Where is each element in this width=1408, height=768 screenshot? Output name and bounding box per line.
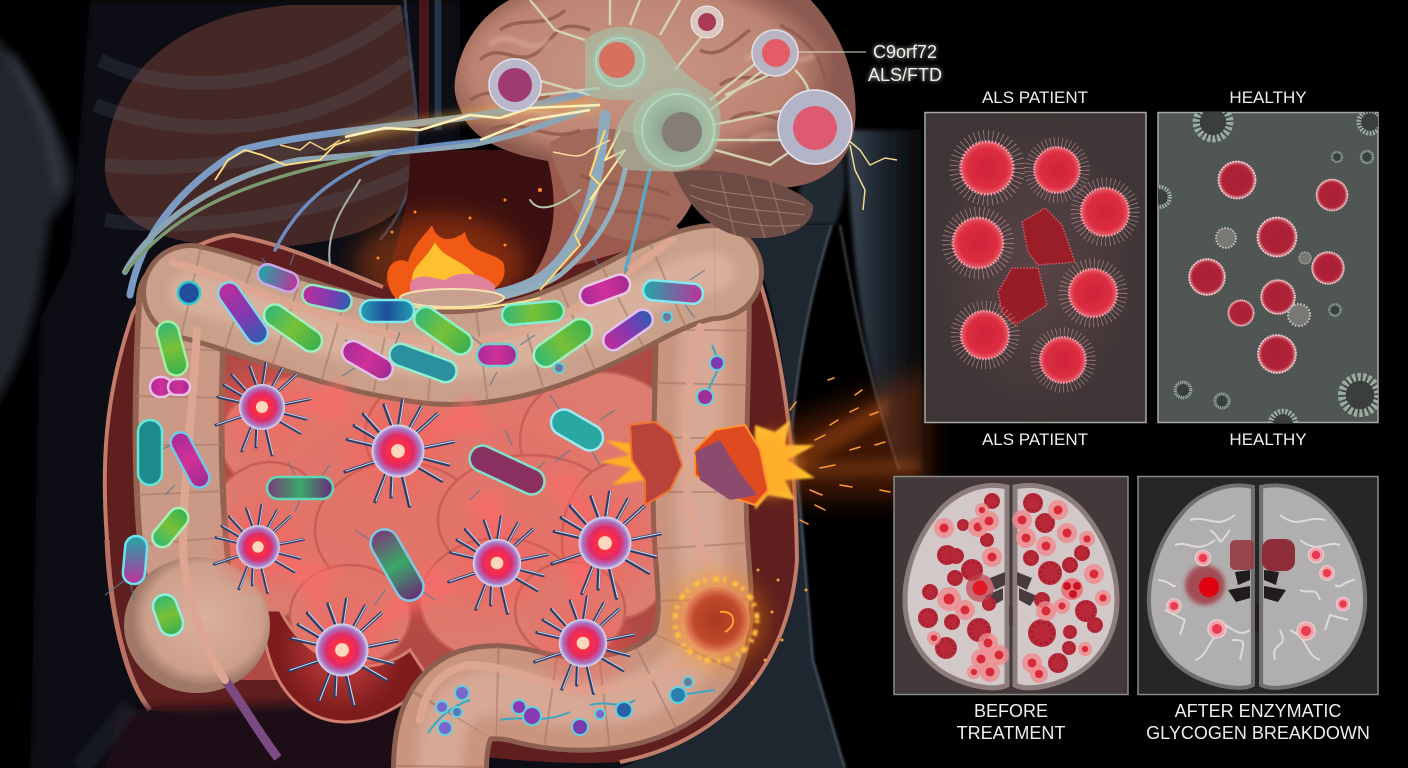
gene label: C9orf72 ALS/FTD: C9orf72 bbox=[873, 42, 937, 62]
caption: before treatment bbox=[957, 701, 1065, 743]
liver and ribcage bbox=[95, 0, 417, 248]
electric signals bbox=[215, 105, 897, 290]
colon bbox=[179, 272, 715, 768]
diseased neuron top bbox=[691, 6, 723, 38]
panel: ALS patient microscopy bbox=[925, 88, 1146, 422]
neuron nucleus: upper bbox=[599, 42, 635, 78]
gut bacteria bbox=[122, 261, 704, 639]
neuron soma cluster bbox=[585, 27, 721, 172]
inflamed lesion bbox=[670, 568, 808, 684]
brainstem and nerves bbox=[125, 90, 650, 310]
heading: ALS patient scan: ALS PATIENT bbox=[982, 430, 1088, 449]
brain neurons bbox=[489, 0, 866, 172]
panel: healthy microscopy bbox=[1150, 88, 1381, 437]
gene label: C9orf72 ALS/FTD: ALS/FTD bbox=[868, 65, 942, 85]
gastric inflammation flame bbox=[376, 188, 542, 309]
stomach and hepatic vessels bbox=[355, 0, 690, 315]
gene label: C9orf72 ALS/FTD: C9orf72 bbox=[873, 42, 937, 62]
colon taeniae bands bbox=[173, 240, 717, 720]
microbe chains bbox=[428, 312, 724, 735]
gene label: C9orf72 ALS/FTD: ALS/FTD bbox=[868, 65, 942, 85]
gene label: C9orf72 ALS/FTD bbox=[868, 42, 942, 85]
panel: before treatment brain scan bbox=[894, 430, 1128, 694]
heading: healthy: HEALTHY bbox=[1229, 88, 1307, 107]
abdominal membrane bbox=[80, 235, 797, 768]
leader line bbox=[797, 51, 866, 53]
leak spray bbox=[770, 370, 930, 524]
caption: before treatment: TREATMENT bbox=[957, 723, 1065, 743]
heading: ALS patient: ALS PATIENT bbox=[982, 88, 1088, 107]
diseased neuron left bbox=[489, 59, 541, 111]
panel: after enzymatic breakdown brain scan bbox=[1138, 430, 1378, 694]
diseased neuron right large bbox=[778, 90, 852, 164]
inflammation rays bbox=[275, 380, 600, 640]
bacterial flagella bbox=[105, 252, 705, 605]
caption: after enzymatic glycogen breakdown: GLYCOGEN BREAKDOWN bbox=[1146, 723, 1370, 743]
caption: after enzymatic glycogen breakdown: AFTER ENZYMATIC bbox=[1175, 701, 1341, 721]
cecum and appendix bbox=[124, 557, 278, 758]
caption: before treatment: BEFORE bbox=[974, 701, 1048, 721]
cerebellum bbox=[673, 170, 813, 238]
brain bbox=[455, 0, 856, 241]
small intestine mass bbox=[205, 345, 685, 722]
inflammatory spiked cells bbox=[206, 352, 668, 713]
diseased neuron right upper bbox=[752, 30, 798, 76]
neuron nucleus: central bbox=[662, 112, 702, 152]
caption: after enzymatic glycogen breakdown bbox=[1146, 701, 1370, 743]
gut wall rupture bbox=[600, 420, 815, 510]
heading: healthy scan: HEALTHY bbox=[1229, 430, 1307, 449]
